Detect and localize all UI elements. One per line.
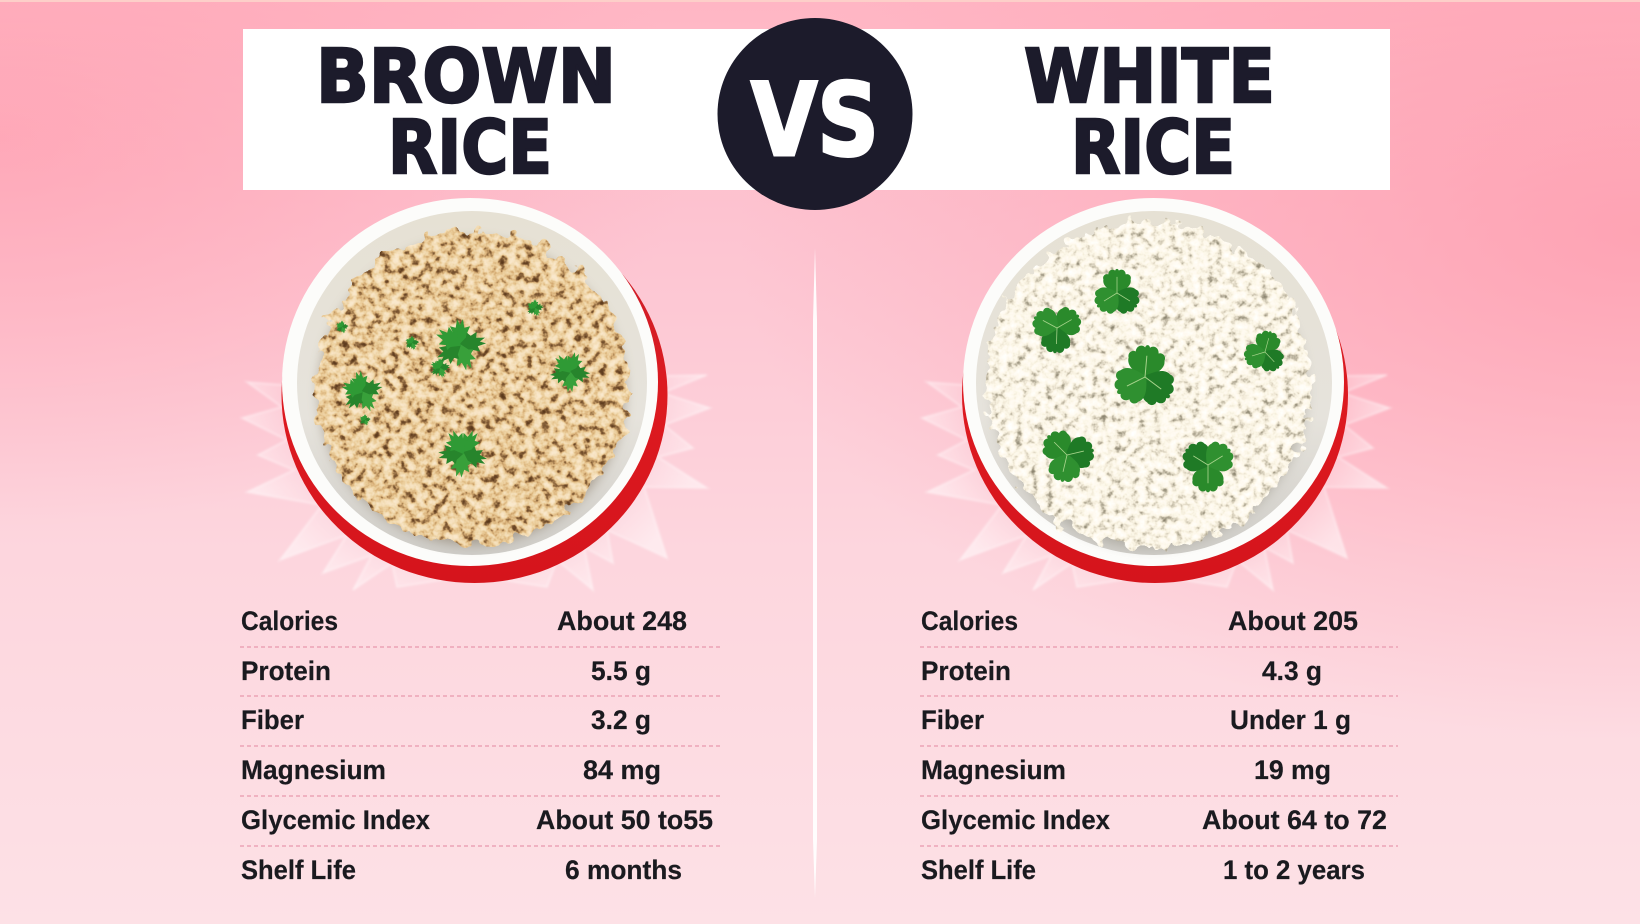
row: glycemic index — [921, 805, 1387, 835]
row: calories — [241, 606, 687, 636]
center divider — [813, 248, 817, 898]
title: brown rice: RICE — [388, 105, 552, 191]
row: shelf life — [921, 855, 1365, 885]
row: shelf life — [241, 855, 682, 885]
table: white rice nutrition — [920, 606, 1398, 885]
row: fiber: Under 1 g — [1230, 705, 1351, 735]
red plate: white — [962, 207, 1348, 583]
row: fiber: Fiber — [921, 705, 984, 735]
row: fiber — [241, 705, 651, 735]
parsley: brown — [335, 299, 597, 489]
title: brown rice: BROWN — [316, 34, 616, 120]
burst: brown — [242, 375, 710, 590]
bowl: brown — [282, 198, 658, 566]
header banner — [243, 29, 1390, 190]
table: brown rice nutrition — [240, 606, 722, 885]
row: glycemic index: Glycemic Index — [241, 805, 430, 835]
row: shelf life: Shelf Life — [241, 855, 356, 885]
row: shelf life: 1 to 2 years — [1223, 855, 1365, 885]
row: glycemic index: Glycemic Index — [921, 805, 1110, 835]
row: calories — [921, 606, 1358, 636]
row: calories: About 248 — [557, 606, 687, 636]
row: calories: About 205 — [1228, 606, 1358, 636]
row: glycemic index: About 64 to 72 — [1202, 805, 1387, 835]
title: white rice — [1024, 34, 1275, 191]
title: white rice: WHITE — [1024, 34, 1275, 120]
row: fiber: Fiber — [241, 705, 304, 735]
vs badge — [718, 18, 912, 210]
row: calories: Calories — [241, 606, 338, 636]
row: protein: 5.5 g — [591, 656, 651, 686]
title: white rice: RICE — [1071, 105, 1235, 191]
row: magnesium: 19 mg — [1254, 755, 1331, 785]
row: calories: Calories — [921, 606, 1018, 636]
rice: white — [986, 222, 1312, 548]
rice: brown — [315, 230, 629, 544]
panel: brown rice bowl — [242, 198, 710, 590]
row: magnesium: Magnesium — [921, 755, 1066, 785]
title: brown rice — [316, 34, 616, 191]
row: magnesium — [241, 755, 661, 785]
row: magnesium — [921, 755, 1331, 785]
row: protein — [241, 656, 651, 686]
row: shelf life: 6 months — [565, 855, 682, 885]
burst: white — [922, 375, 1390, 590]
vs badge: VS — [751, 61, 879, 179]
row: magnesium: 84 mg — [583, 755, 661, 785]
row: protein: Protein — [921, 656, 1011, 686]
row: fiber — [921, 705, 1351, 735]
row: glycemic index: About 50 to55 — [536, 805, 713, 835]
bowl: white — [963, 198, 1344, 566]
row: protein: 4.3 g — [1262, 656, 1322, 686]
row: glycemic index — [241, 805, 713, 835]
row: shelf life: Shelf Life — [921, 855, 1036, 885]
red plate: brown — [282, 207, 668, 583]
row: protein — [921, 656, 1322, 686]
row: magnesium: Magnesium — [241, 755, 386, 785]
row: fiber: 3.2 g — [591, 705, 651, 735]
row: protein: Protein — [241, 656, 331, 686]
panel: white rice bowl — [922, 198, 1390, 590]
parsley: white — [1020, 269, 1294, 497]
